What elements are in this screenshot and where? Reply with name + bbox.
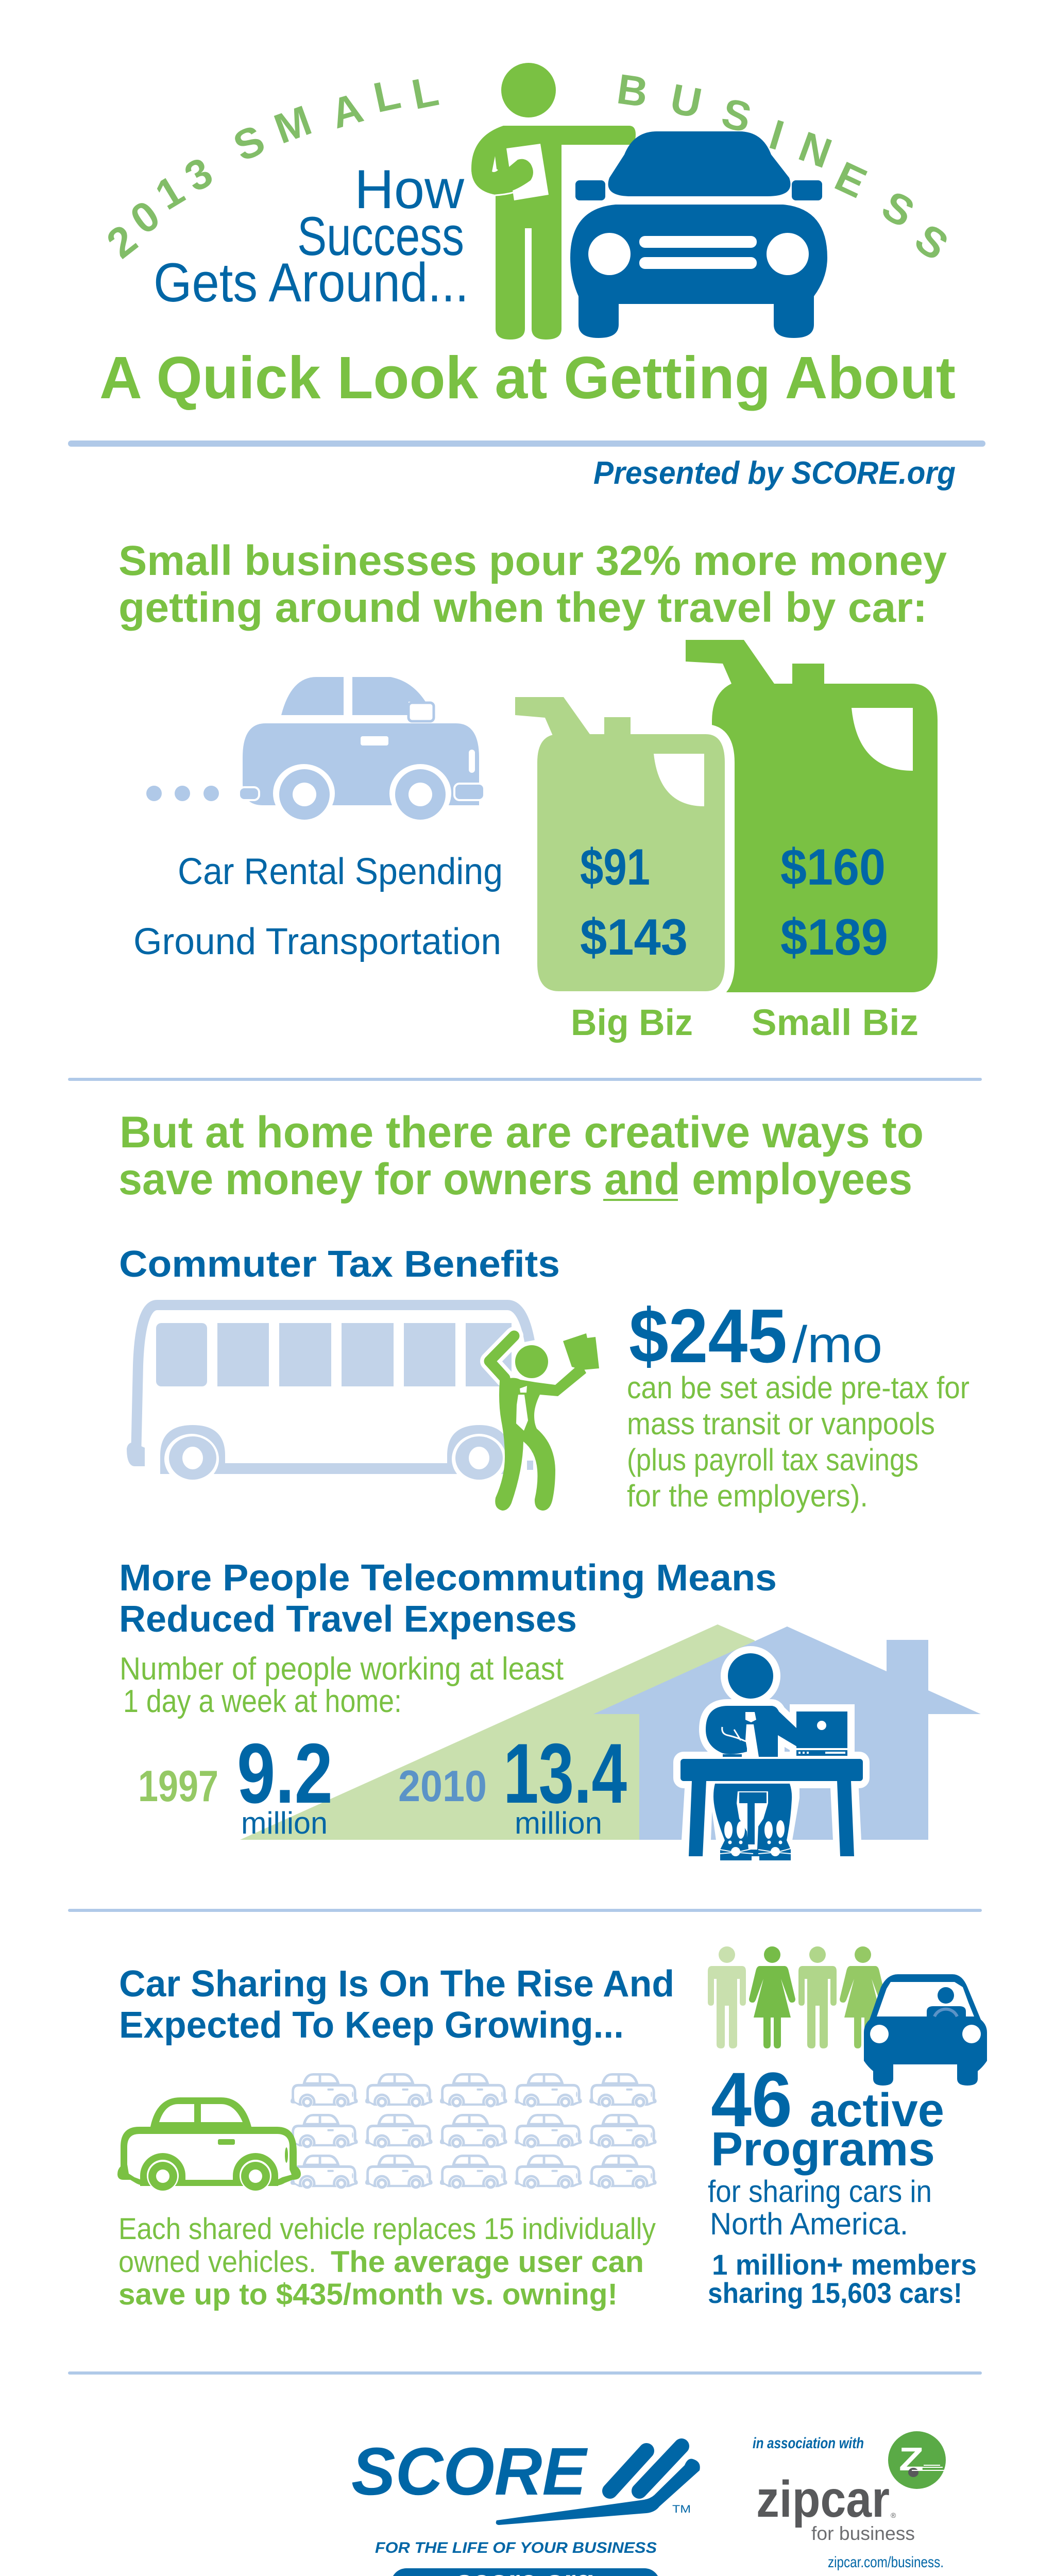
subheading: car sharing on the rise: Expected To Keep Growing... — [119, 2005, 624, 2046]
heading: creative ways to save: But at home there are creative ways to — [120, 1108, 924, 1157]
stat: 1997 9.2 million — [138, 1726, 333, 1840]
text block: for sharing cars in north america: North America. — [710, 2207, 908, 2241]
text block: pre-tax set aside: for the employers). — [627, 1479, 868, 1513]
table values: dollar amounts: $91 — [580, 838, 650, 895]
button: score.org pill — [391, 2564, 660, 2576]
stat: 46 active programs — [711, 2056, 944, 2176]
title: A Quick Look at Getting About — [99, 344, 956, 411]
text block: pre-tax set aside: mass transit or vanpools — [627, 1406, 935, 1441]
stat: 1997 9.2 million: 1997 — [138, 1762, 218, 1811]
chart: rising green triangle — [240, 1624, 773, 1840]
partner: zipcar for business: ® — [891, 2511, 896, 2519]
arched heading: 2013 small business: A — [326, 84, 368, 138]
text block: number of people working at home — [120, 1651, 564, 1719]
subheading: telecommuting: Reduced Travel Expenses — [119, 1599, 577, 1640]
subheading: car sharing on the rise — [119, 1963, 674, 2046]
arched heading: 2013 small business — [98, 65, 957, 269]
partner: zipcar for business: for business — [811, 2523, 915, 2544]
arched heading: 2013 small business: 0 — [122, 192, 168, 244]
arched heading: 2013 small business: B — [614, 65, 651, 116]
icon: house — [593, 1626, 981, 1840]
subtitle: how success gets around — [154, 158, 469, 313]
subheading: commuter tax benefits: Commuter Tax Benefits — [119, 1244, 560, 1285]
arched heading: 2013 small business: S — [227, 116, 271, 171]
logo: score — [351, 2433, 700, 2525]
stat: 2010 13.4 million: million — [515, 1806, 602, 1840]
logo: score: TM — [672, 2503, 691, 2515]
subtitle: how success gets around: Gets Around... — [154, 251, 469, 313]
presented by line: Presented by SCORE.org — [593, 455, 956, 491]
table labels: spending categories: Ground Transportation — [133, 921, 501, 962]
arched heading: 2013 small business: S — [717, 90, 756, 142]
text block: each shared vehicle replaces 15: save up to $435/month vs. owning! — [118, 2278, 618, 2311]
arched heading: 2013 small business: N — [793, 123, 838, 177]
table values: dollar amounts: $189 — [780, 908, 888, 965]
stat: 46 active programs: 46 — [711, 2056, 792, 2143]
tagline: FOR THE LIFE OF YOUR BUSINESS — [375, 2539, 657, 2556]
column labels: big biz and small biz — [571, 1003, 918, 1043]
arched heading: 2013 small business: 3 — [177, 148, 220, 201]
text block: pre-tax set aside: can be set aside pre-tax for — [627, 1370, 969, 1405]
icon: commuter with book — [489, 1333, 599, 1511]
stat: 245 dollars per month — [629, 1294, 882, 1379]
partner: zipcar for business: zipcar.com/business. — [828, 2554, 944, 2571]
heading: small businesses pour more money: Small businesses pour 32% more money — [118, 537, 947, 584]
arched heading: 2013 small business: M — [268, 97, 317, 153]
stat: 245 dollars per month: /mo — [792, 1316, 882, 1374]
text block: each shared vehicle replaces 15: The average user can — [331, 2245, 644, 2279]
subheading: telecommuting: More People Telecommuting Means — [119, 1557, 777, 1599]
icon: person at desk with bunny slippers — [673, 1646, 870, 1860]
stat: 1997 9.2 million: 9.2 — [237, 1726, 333, 1821]
arched heading: 2013 small business: E — [828, 153, 873, 207]
stat: 46 active programs: active — [810, 2084, 944, 2137]
icon: row of four people — [708, 1946, 886, 2048]
text block: pre-tax set aside — [627, 1370, 969, 1513]
text block: number of people working at home: Number of people working at least — [120, 1651, 564, 1687]
icon: man leaning on car — [471, 63, 636, 340]
stat: 245 dollars per month: $245 — [629, 1294, 787, 1379]
icon: green shared car — [117, 2097, 301, 2192]
stat: one million members — [708, 2248, 977, 2309]
stat: 2010 13.4 million: 13.4 — [503, 1726, 627, 1821]
subtitle: how success gets around: How — [354, 158, 465, 220]
arched heading: 2013 small business: L — [408, 67, 443, 118]
icon: bus — [127, 1305, 533, 1484]
text block: each shared vehicle replaces 15 — [118, 2212, 656, 2311]
icon: blue shared car with driver — [864, 1974, 987, 2086]
icon: moving light blue car — [146, 677, 484, 823]
text block: pre-tax set aside: (plus payroll tax savings — [627, 1443, 918, 1477]
table values: dollar amounts: $143 — [580, 908, 688, 965]
partner: zipcar for business: Z — [899, 2441, 924, 2478]
heading: small businesses pour more money — [118, 537, 947, 631]
icon: small light green fuel jug — [515, 697, 725, 991]
text block: each shared vehicle replaces 15: Each shared vehicle replaces 15 individually — [118, 2212, 656, 2246]
arched heading: 2013 small business: S — [906, 215, 957, 269]
partner: zipcar for business: zipcar — [756, 2470, 890, 2528]
stat: 2010 13.4 million — [398, 1726, 627, 1840]
subheading: car sharing on the rise: Car Sharing Is On The Rise And — [119, 1963, 674, 2005]
text block: number of people working at home: 1 day a week at home: — [123, 1684, 402, 1719]
arched heading: 2013 small business: I — [764, 111, 789, 159]
arched heading: 2013 small business: 2 — [98, 216, 146, 267]
column labels: big biz and small biz: Small Biz — [752, 1003, 918, 1043]
text block: for sharing cars in north america: for sharing cars in — [708, 2174, 932, 2209]
text block: each shared vehicle replaces 15: owned vehicles. — [118, 2245, 316, 2279]
table labels: spending categories — [133, 851, 503, 962]
stat: one million members: sharing 15,603 cars! — [708, 2277, 962, 2309]
arched heading: 2013 small business: S — [874, 182, 922, 236]
partner: zipcar for business: in association with — [753, 2435, 864, 2452]
subheading: telecommuting — [119, 1557, 777, 1640]
heading: creative ways to save: save money for owners and employees — [118, 1155, 912, 1204]
icon: blue car front — [570, 131, 827, 338]
arched heading: 2013 small business: U — [667, 75, 705, 127]
stat: one million members: 1 million+ members — [712, 2248, 977, 2281]
arched heading: 2013 small business: L — [369, 71, 404, 122]
icon: grid of fifteen replaced cars — [291, 2073, 657, 2189]
text block: for sharing cars in north america — [708, 2174, 932, 2241]
stat: 1997 9.2 million: million — [241, 1806, 328, 1840]
icon: large green fuel jug — [686, 640, 938, 992]
heading: small businesses pour more money: getting around when they travel by car: — [118, 584, 927, 631]
heading: creative ways to save — [118, 1108, 924, 1204]
stat: 2010 13.4 million: 2010 — [398, 1762, 487, 1811]
table values: dollar amounts — [580, 838, 888, 965]
subtitle: how success gets around: Success — [297, 205, 464, 267]
table values: dollar amounts: $160 — [780, 838, 886, 895]
logo: score: SCORE — [351, 2433, 588, 2509]
arched heading: 2013 small business: 1 — [148, 167, 192, 219]
column labels: big biz and small biz: Big Biz — [571, 1003, 693, 1043]
stat: 46 active programs: Programs — [711, 2122, 935, 2176]
partner: zipcar for business — [753, 2431, 946, 2571]
table labels: spending categories: Car Rental Spending — [178, 851, 503, 892]
